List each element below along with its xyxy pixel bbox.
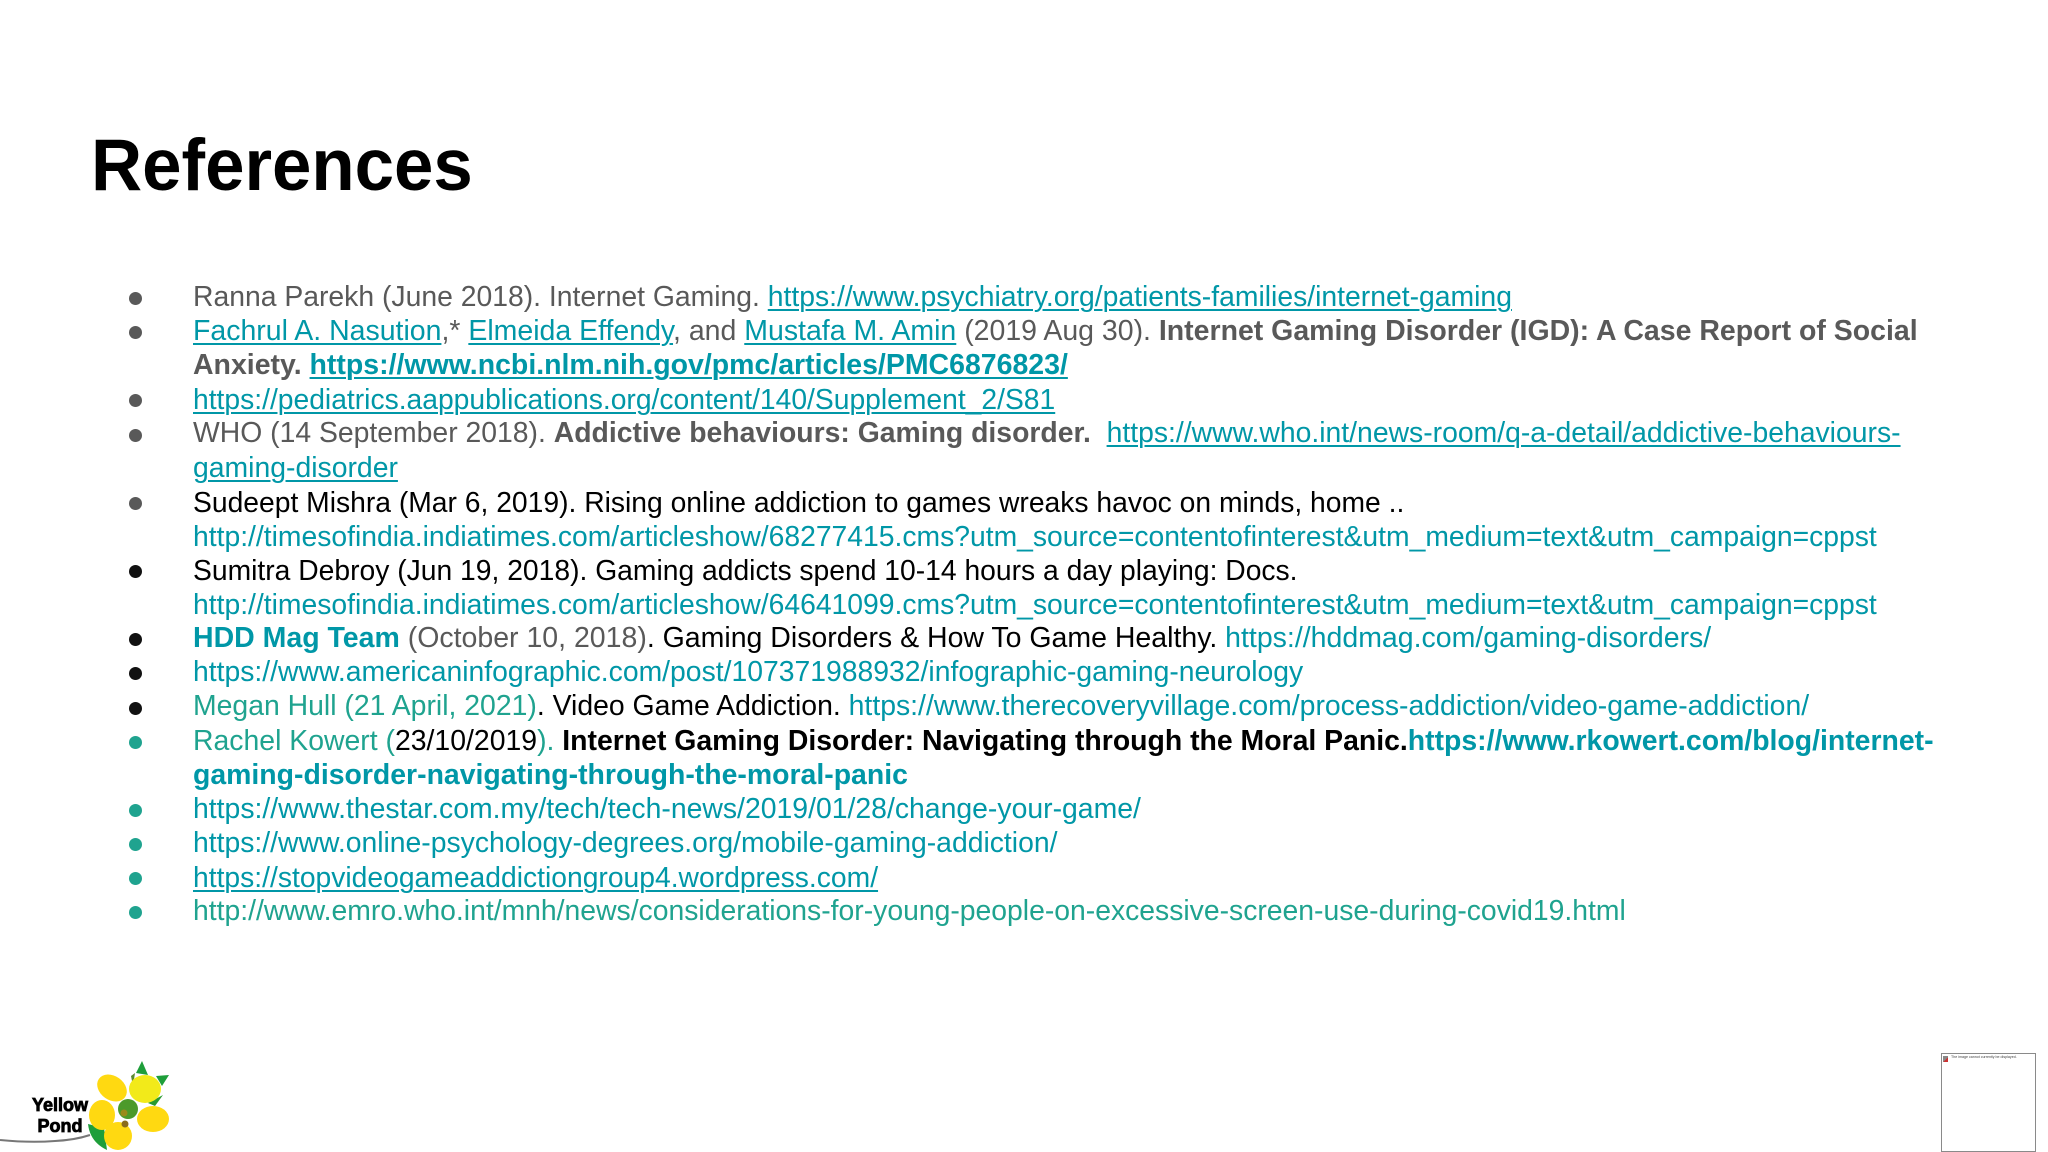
reference 13: https://stopvideogameaddictiongroup4.wordpress.com/ (193, 861, 878, 893)
reference 6 line 1: Sumitra Debroy (Jun 19, 2018). Gaming addicts spend 10-14 hours a day playing: Docs. (193, 554, 1298, 586)
bullet 14 (129, 906, 142, 919)
reference 2 line 2: Anxiety. https://www.ncbi.nlm.nih.gov/pmc/articles/PMC6876823/ (193, 349, 1068, 381)
bullet 10 (129, 736, 142, 749)
reference 4 line 1: WHO (14 September 2018). Addictive behaviours: Gaming disorder. https://www.who.int/news-room/q-a-detail/addictive-behaviours- (193, 417, 1901, 449)
reference 5 line 1: Sudeept Mishra (Mar 6, 2019). Rising online addiction to games wreaks havoc on minds, home .. (193, 486, 1404, 518)
bullet 8 (129, 667, 142, 680)
reference 2 line 1: Fachrul A. Nasution,* Elmeida Effendy, and Mustafa M. Amin (2019 Aug 30). Internet Gaming Disorder (IGD): A Case Report of Social (193, 315, 1918, 347)
reference 14: http://www.emro.who.int/mnh/news/considerations-for-young-people-on-excessive-screen-use-during-covid19.html (193, 895, 1626, 927)
reference 10 line 2: gaming-disorder-navigating-through-the-moral-panic (193, 759, 908, 791)
reference 3: https://pediatrics.aappublications.org/content/140/Supplement_2/S81 (193, 383, 1055, 415)
reference 12: https://www.online-psychology-degrees.org/mobile-gaming-addiction/ (193, 827, 1057, 859)
reference 1: Ranna Parekh (June 2018). Internet Gaming. https://www.psychiatry.org/patients-families/internet-gaming (193, 281, 1512, 313)
title: References (91, 125, 473, 206)
bullet 12 (129, 838, 142, 851)
bullet 2 (129, 326, 142, 339)
bullet 5 (129, 497, 142, 510)
logo: Yellow Pond (0, 1061, 169, 1150)
broken image icon (1943, 1056, 1948, 1062)
logo text: Pond (38, 1116, 82, 1136)
reference 7: HDD Mag Team (October 10, 2018). Gaming Disorders & How To Game Healthy. https://hddmag.com/gaming-disorders/ (193, 622, 1711, 654)
reference 5 line 2: http://timesofindia.indiatimes.com/articleshow/68277415.cms?utm_source=contentofinterest&utm_medium=text&utm_campaign=cppst (193, 520, 1877, 552)
bullet 1 (129, 292, 142, 305)
bullet 4 (129, 428, 142, 442)
reference 9: Megan Hull (21 April, 2021). Video Game Addiction. https://www.therecoveryvillage.com/process-addiction/video-game-addiction/ (193, 690, 1809, 722)
reference 8: https://www.americaninfographic.com/post/107371988932/infographic-gaming-neurology (193, 656, 1303, 688)
logo text: Yellow (32, 1095, 89, 1115)
reference 6 line 2: http://timesofindia.indiatimes.com/articleshow/64641099.cms?utm_source=contentofinterest&utm_medium=text&utm_campaign=cppst (193, 588, 1877, 620)
stem (0, 1135, 90, 1142)
reference 11: https://www.thestar.com.my/tech/tech-news/2019/01/28/change-your-game/ (193, 793, 1141, 825)
image placeholder box (1941, 1053, 2036, 1152)
placeholder text: The image cannot currently be displayed. (1951, 1055, 2017, 1059)
reference 4 line 2: gaming-disorder (193, 452, 398, 484)
bullet 9 (129, 702, 142, 715)
icon: flower (88, 1061, 169, 1150)
bullet 6 (129, 565, 142, 578)
bullet 3 (129, 394, 142, 407)
bullet 13 (129, 872, 142, 885)
bullet 7 (129, 633, 142, 646)
bullet 11 (129, 804, 142, 817)
reference 10 line 1: Rachel Kowert (23/10/2019). Internet Gaming Disorder: Navigating through the Moral Panic.https://www.rkowert.com/blog/internet- (193, 725, 1934, 757)
logo text (32, 1095, 89, 1136)
